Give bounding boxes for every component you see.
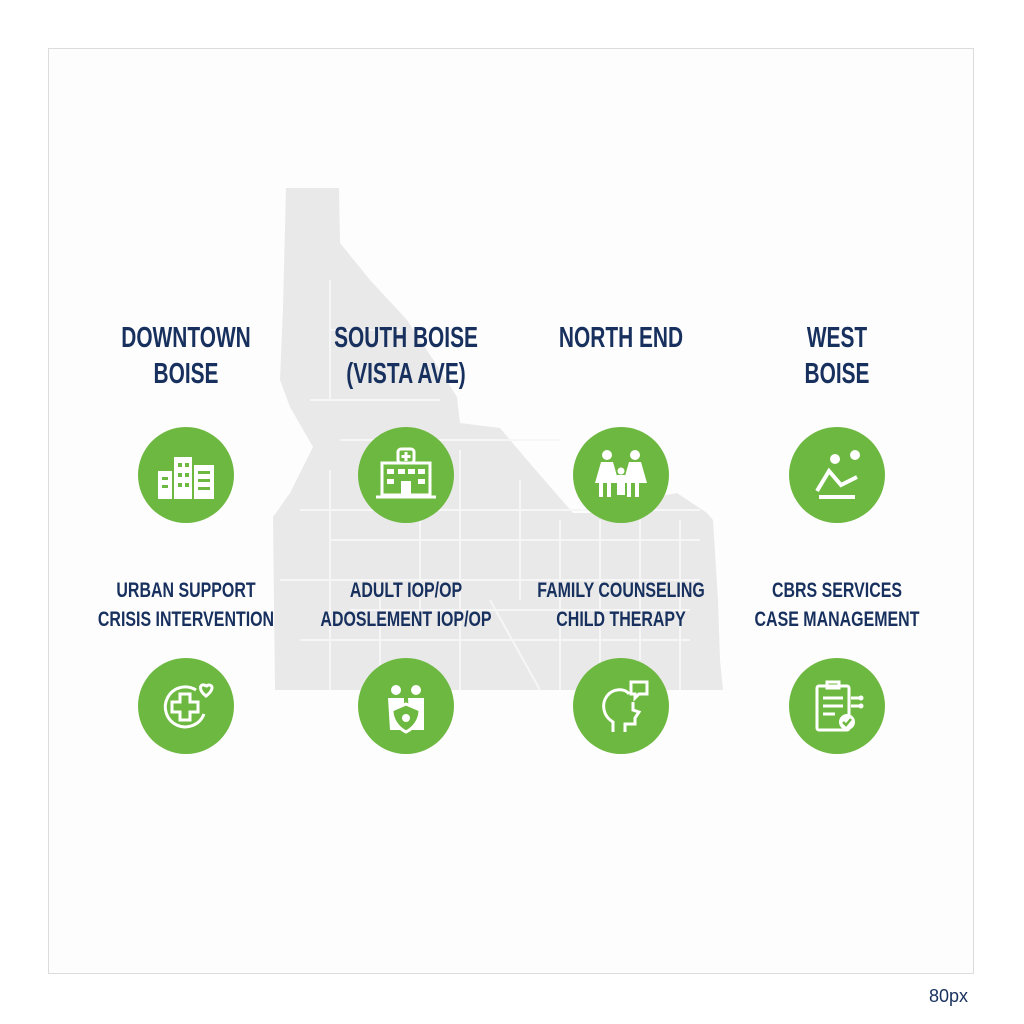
text: family counseling — [537, 579, 705, 631]
text: urban support: URBAN SUPPORT — [116, 579, 256, 602]
heading: North End: NORTH END — [559, 322, 683, 354]
text: CBRS: CBRS SERVICES — [772, 579, 902, 602]
text: family counseling: CHILD THERAPY — [556, 608, 686, 631]
heading: Downtown Boise — [121, 322, 251, 390]
label: size note: 80px — [929, 986, 968, 1006]
icon: clipboard — [789, 658, 885, 754]
heading: South Boise — [334, 322, 478, 390]
heading: South Boise: (VISTA AVE) — [346, 358, 466, 390]
text: CBRS: CASE MANAGEMENT — [755, 608, 919, 631]
icon: buildings — [138, 427, 234, 523]
icon: people shield — [358, 658, 454, 754]
heading: South Boise: SOUTH BOISE — [334, 322, 478, 354]
icon: cross heart — [138, 658, 234, 754]
text: urban support — [98, 579, 274, 631]
text: adult IOP: ADULT IOP/OP — [350, 579, 462, 602]
text: urban support: CRISIS INTERVENTION — [98, 608, 274, 631]
heading: West Boise: WEST — [807, 322, 867, 354]
text: adult IOP — [320, 579, 492, 631]
heading: West Boise — [805, 322, 869, 390]
heading: Downtown Boise: DOWNTOWN — [121, 322, 251, 354]
icon: hospital — [358, 427, 454, 523]
text: CBRS — [755, 579, 920, 631]
text: family counseling: FAMILY COUNSELING — [537, 579, 705, 602]
heading: Downtown Boise: BOISE — [154, 358, 218, 390]
heading: West Boise: BOISE — [805, 358, 869, 390]
text: adult IOP: ADOSLEMENT IOP/OP — [320, 608, 492, 631]
icon: head speech — [573, 658, 669, 754]
icon: activity — [789, 427, 885, 523]
icon: family — [573, 427, 669, 523]
